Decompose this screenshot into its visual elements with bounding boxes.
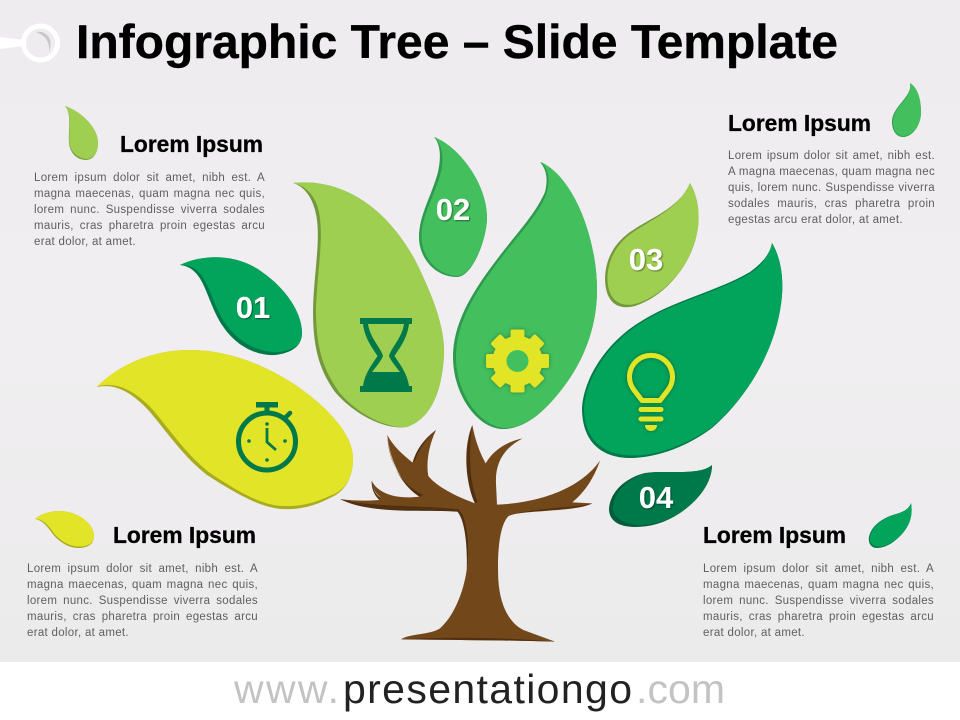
leaf: light bulb bbox=[582, 243, 782, 458]
footer url: .com bbox=[636, 666, 725, 712]
text block: bottom left bbox=[27, 563, 258, 639]
number 04: 04 bbox=[639, 480, 674, 515]
icon: gear bbox=[486, 330, 549, 392]
text block: top left: erat dolor, at amet. bbox=[34, 236, 136, 248]
leaf 04 bbox=[609, 465, 712, 527]
text block: top right: egestas arcu erat dolor, at amet. bbox=[728, 214, 903, 226]
text block: top left: Lorem ipsum dolor sit amet, nibh est. A bbox=[34, 172, 265, 184]
leaf: gear bbox=[453, 162, 597, 429]
small leaf: top right bbox=[892, 83, 921, 137]
small leaf: bottom left bbox=[35, 511, 94, 548]
text block: bottom left: Lorem ipsum dolor sit amet, nibh est. A bbox=[27, 563, 258, 575]
text block: bottom right: mauris, cras pharetra proin egestas arcu bbox=[703, 611, 934, 623]
footer url: presentationgo bbox=[343, 666, 632, 712]
logo ring bbox=[0, 26, 58, 60]
icon: light bulb bbox=[630, 355, 672, 431]
text block: top right: Lorem ipsum dolor sit amet, nibh est. bbox=[728, 150, 935, 162]
icon: hourglass bbox=[360, 318, 412, 392]
text block: bottom left: lorem nunc. Suspendisse viverra sodales bbox=[27, 595, 258, 607]
text block: bottom right bbox=[703, 563, 934, 639]
text block: top left bbox=[34, 172, 265, 248]
footer url: www. bbox=[233, 666, 339, 712]
text block: bottom left: magna maecenas, quam magna nec quis, bbox=[27, 579, 258, 591]
text block: top left: mauris, cras pharetra proin egestas arcu bbox=[34, 220, 265, 232]
text block: top right: A magna maecenas, quam magna nec bbox=[728, 166, 935, 178]
tree bbox=[340, 425, 600, 642]
leaf: stopwatch bbox=[97, 350, 353, 509]
footer url bbox=[233, 666, 725, 712]
heading: top left: Lorem Ipsum bbox=[120, 131, 263, 157]
text block: top right: sodales mauris, cras pharetra proin bbox=[728, 198, 935, 210]
text block: bottom left: erat dolor, at amet. bbox=[27, 627, 129, 639]
title: Infographic Tree – Slide Template bbox=[76, 15, 838, 68]
number 03: 03 bbox=[629, 242, 663, 277]
leaf 02 bbox=[419, 137, 487, 277]
text block: bottom right: Lorem ipsum dolor sit amet, nibh est. A bbox=[703, 563, 934, 575]
heading: bottom left: Lorem Ipsum bbox=[113, 522, 256, 548]
heading: bottom right: Lorem Ipsum bbox=[703, 522, 846, 548]
leaf 03 bbox=[605, 183, 699, 307]
text block: top right bbox=[728, 150, 935, 226]
text block: bottom right: erat dolor, at amet. bbox=[703, 627, 805, 639]
text block: top right: quis, lorem nunc. Suspendisse viverra bbox=[728, 182, 935, 194]
heading: top right: Lorem Ipsum bbox=[728, 110, 871, 136]
leaf 01 bbox=[180, 257, 302, 355]
text block: top left: lorem nunc. Suspendisse viverra sodales bbox=[34, 204, 265, 216]
small leaf: bottom right bbox=[869, 503, 912, 548]
icon: stopwatch bbox=[238, 405, 296, 470]
leaf: hourglass bbox=[293, 182, 444, 427]
text block: bottom right: lorem nunc. Suspendisse viverra sodales bbox=[703, 595, 934, 607]
text block: bottom left: mauris, cras pharetra proin egestas arcu bbox=[27, 611, 258, 623]
small leaf: top left bbox=[65, 106, 98, 160]
text block: bottom right: magna maecenas, quam magna nec quis, bbox=[703, 579, 934, 591]
text block: top left: magna maecenas, quam magna nec quis, bbox=[34, 188, 265, 200]
number 02: 02 bbox=[436, 192, 470, 227]
number 01: 01 bbox=[236, 290, 270, 325]
